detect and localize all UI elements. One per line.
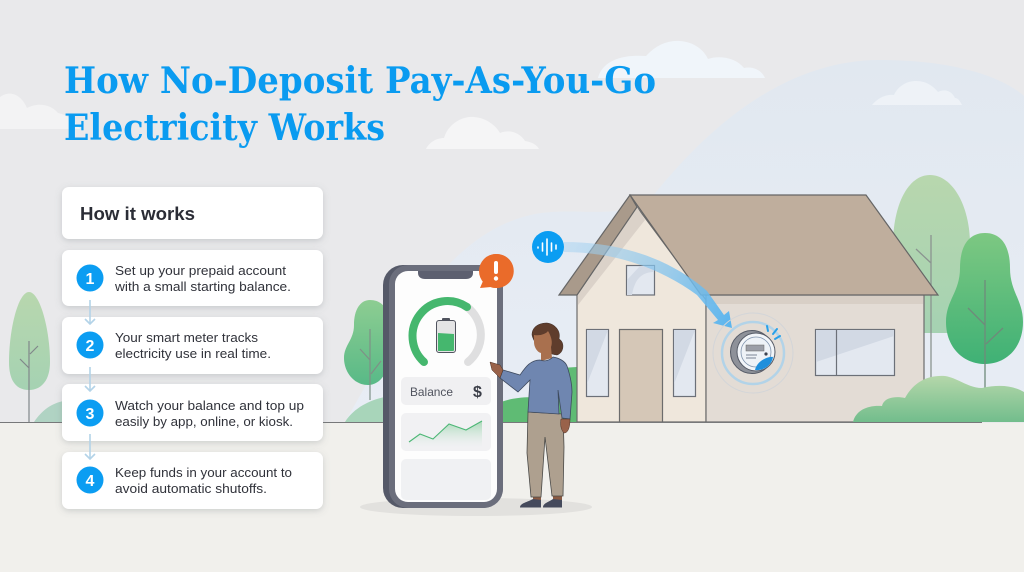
tree: dark right [946,233,1023,388]
door [620,330,662,422]
heading card: How it works [80,204,195,224]
step 2: 2 [86,338,95,355]
heading card [62,187,323,239]
line chart row [401,413,491,451]
cloud: top right [598,41,765,78]
step 4: Keep funds in your account to [115,466,292,480]
step 4: avoid automatic shutoffs. [115,482,267,496]
title: Electricity Works [64,107,385,149]
step 1: with a small starting balance. [114,280,291,294]
left side window [586,330,608,396]
phone screen [395,271,497,502]
title: How No-Deposit Pay-As-You-Go [64,60,656,102]
person hands [490,362,570,433]
icon: signal waves [532,231,564,263]
step 1: Set up your prepaid account [115,264,287,278]
arrow: step 1 to 2 [85,300,95,324]
ground line [0,422,982,424]
cloud: left [0,94,80,129]
ground shadow [360,498,592,516]
balance row: Balance [410,385,453,399]
large window [816,330,894,376]
step 3: 3 [86,406,95,423]
step 2: Your smart meter tracks [115,331,258,345]
icon: battery [436,318,456,352]
cloud: center [426,117,539,149]
signal arrow to meter [564,242,732,328]
step 2 [62,317,323,374]
person sweater [500,357,572,419]
bush: behind person [501,367,577,422]
ground [0,423,1024,572]
title [64,60,656,149]
step 4: 4 [86,473,95,490]
panel: how it works [62,187,323,509]
cloud: far right [872,81,962,105]
bush: behind phone [345,397,385,422]
empty row [401,459,491,500]
arrow: step 2 to 3 [85,367,95,391]
bush: bottom left [34,401,64,422]
icon: smart meter [713,313,793,393]
person face and neck [534,331,552,361]
balance row: $ [473,384,482,401]
step 3 [62,384,323,441]
arrow: step 3 to 4 [85,434,95,459]
step 3: Watch your balance and top up [115,399,304,413]
background hill [345,60,1024,422]
phone notch [418,271,473,279]
house [559,195,938,422]
step 3: easily by app, online, or kiosk. [115,415,293,429]
icon: alert bubble [479,254,514,288]
roof [630,195,938,295]
tree: beside phone [344,300,392,400]
step 1 [62,250,323,306]
bush: right [853,376,1024,422]
battery gauge [413,301,481,362]
person hair [532,323,563,355]
person [490,323,572,508]
step 1: 1 [86,271,95,288]
gable trim [559,195,637,295]
balance row [401,377,491,405]
step 4 [62,452,323,509]
right side window [674,330,696,396]
phone [383,265,503,508]
tree: far left [9,292,50,422]
phone body [383,265,503,508]
tree: light behind house [893,175,970,385]
upper window [626,266,654,295]
person shoes [520,499,562,508]
step 2: electricity use in real time. [115,347,271,361]
person ankles [533,495,562,501]
person pants [527,412,564,497]
house walls [577,207,706,422]
